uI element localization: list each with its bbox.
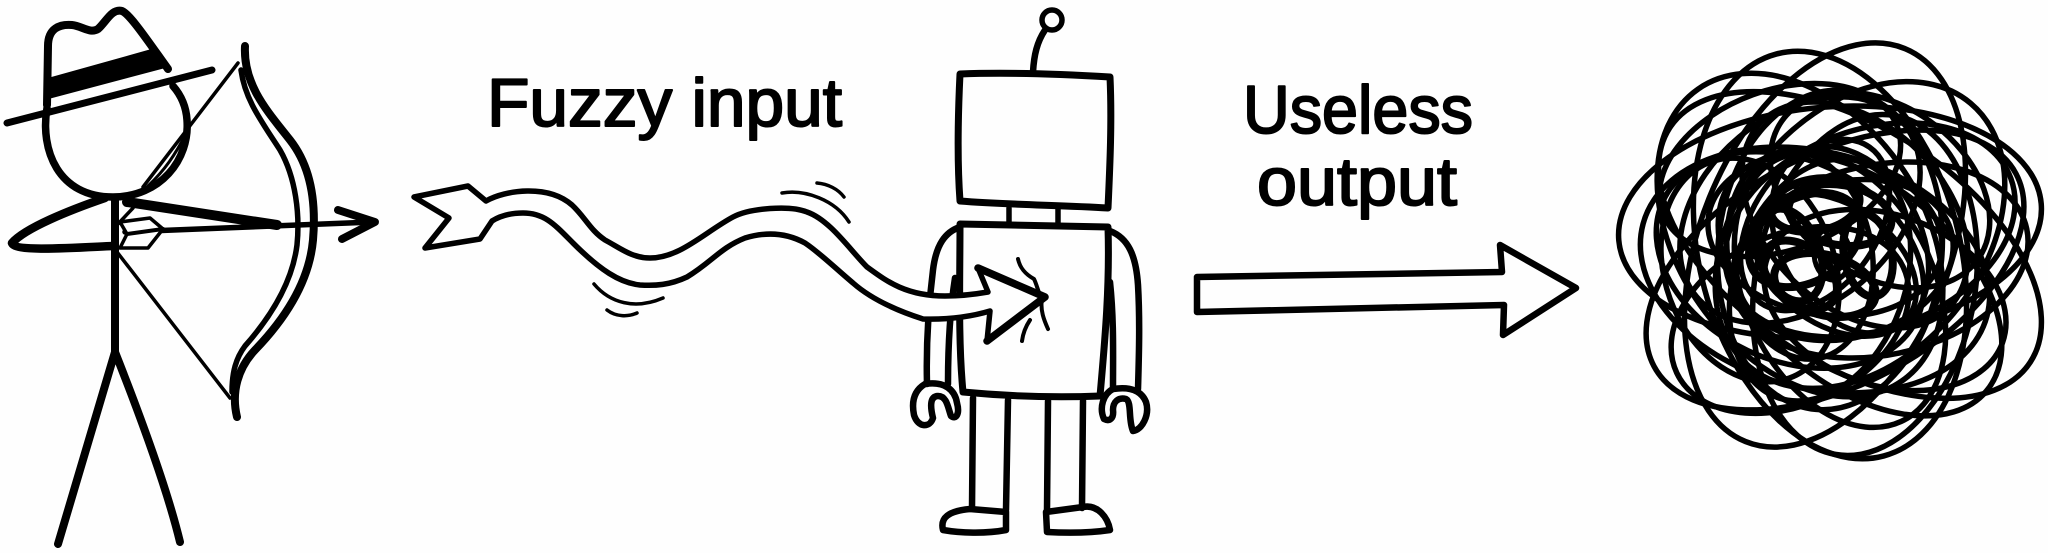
hat xyxy=(7,11,212,123)
neck xyxy=(1009,208,1058,226)
arms xyxy=(12,198,277,249)
output arrow xyxy=(1197,245,1576,335)
motion marks xyxy=(594,183,849,316)
right foot xyxy=(1046,507,1110,533)
impact cracks xyxy=(1018,259,1048,341)
right hand xyxy=(1102,388,1147,431)
left arm xyxy=(927,227,960,384)
bow xyxy=(117,46,314,417)
robot head xyxy=(958,73,1111,208)
left foot xyxy=(942,509,1006,533)
label: Fuzzy input: Fuzzy input xyxy=(487,65,842,141)
legs xyxy=(972,398,1083,510)
right arm xyxy=(1110,231,1139,389)
stick figure archer xyxy=(7,11,375,544)
tangled scribble xyxy=(1598,2,2048,490)
label: Useless output: output xyxy=(1257,144,1457,220)
left hand xyxy=(913,383,958,425)
body and legs xyxy=(58,200,180,544)
drawn arrow on bow xyxy=(120,210,375,248)
label: Useless output: Useless xyxy=(1243,72,1473,148)
antenna xyxy=(1033,10,1062,72)
head xyxy=(46,86,187,197)
dense core ring xyxy=(1732,172,1899,327)
robot body xyxy=(960,224,1108,397)
robot xyxy=(913,10,1147,533)
fuzzy arrow hitting robot xyxy=(414,183,1048,341)
arrow head emphasis xyxy=(978,268,1045,341)
label: Useless output xyxy=(1243,72,1473,220)
